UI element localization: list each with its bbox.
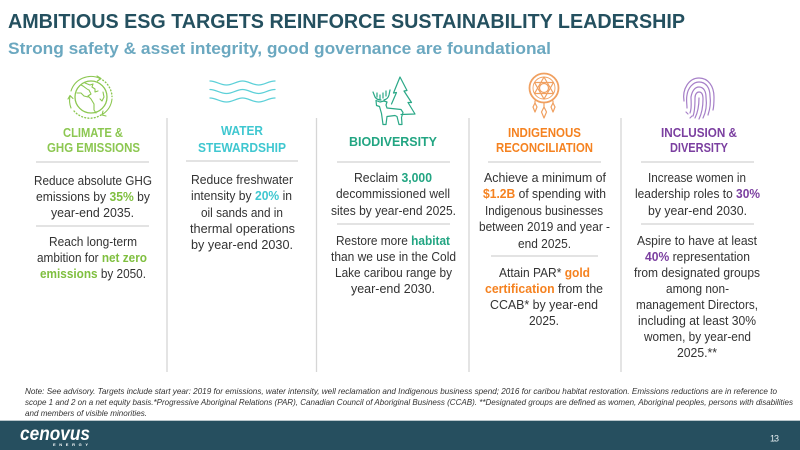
text: indigenous targets: CCAB* by year-end bbox=[490, 298, 598, 312]
icon: deer and tree bbox=[373, 77, 415, 124]
text: inclusion targets: among non- bbox=[666, 282, 729, 296]
heading: inclusion: DIVERSITY bbox=[670, 141, 729, 155]
heading: climate: CLIMATE & bbox=[63, 126, 123, 140]
text: inclusion targets: management Directors, bbox=[636, 298, 758, 312]
text: climate targets bbox=[34, 174, 152, 281]
subtitle: Strong safety & asset integrity, good governance are foundational bbox=[8, 40, 551, 58]
text: inclusion targets: women, by year-end bbox=[643, 330, 751, 344]
text: biodiversity targets: Restore more habitat bbox=[336, 234, 451, 248]
heading: water bbox=[198, 124, 286, 155]
text: biodiversity targets: Lake caribou range by bbox=[335, 266, 453, 280]
text: biodiversity targets: year-end 2030. bbox=[351, 282, 435, 296]
heading: climate: GHG EMISSIONS bbox=[47, 141, 140, 155]
text: biodiversity targets: Reclaim 3,000 bbox=[354, 171, 432, 185]
text: inclusion targets: Aspire to have at least bbox=[637, 234, 758, 248]
title: AMBITIOUS ESG TARGETS REINFORCE SUSTAINABILITY LEADERSHIP bbox=[8, 10, 685, 33]
text: indigenous targets: Attain PAR* gold bbox=[499, 266, 590, 280]
text: inclusion targets: Increase women in bbox=[648, 171, 746, 185]
text: inclusion targets bbox=[634, 171, 760, 360]
text: indigenous targets: between 2019 and year - bbox=[479, 220, 610, 234]
icon: waves bbox=[210, 81, 275, 102]
logo: ENERGY bbox=[53, 442, 88, 447]
heading: inclusion: INCLUSION & bbox=[661, 126, 737, 140]
text: climate targets: emissions by 35% by bbox=[36, 190, 151, 204]
icon: dreamcatcher bbox=[530, 74, 558, 118]
heading: biodiversity: BIODIVERSITY bbox=[349, 135, 438, 149]
text: indigenous targets: $1.2B of spending with bbox=[483, 187, 606, 201]
text: water target bbox=[190, 173, 295, 252]
text: water target: intensity by 20% in bbox=[191, 189, 292, 203]
heading: indigenous: RECONCILIATION bbox=[496, 141, 593, 155]
text: water target: by year-end 2030. bbox=[191, 238, 293, 252]
heading: indigenous: INDIGENOUS bbox=[508, 126, 581, 140]
text: water target: Reduce freshwater bbox=[191, 173, 293, 187]
text: inclusion targets: from designated groups bbox=[634, 266, 760, 280]
text: water target: oil sands and in bbox=[201, 206, 283, 220]
footnote: Note: See advisory. Targets include start year: 2019 for emissions, water intensity, well reclamation and Indigenous business spend; 2016 for caribou habitat restoration. Emissions reductions are in reference to bbox=[25, 386, 777, 396]
logo: cenovus bbox=[20, 424, 90, 445]
panel: climate and GHG emissions bbox=[34, 76, 152, 281]
heading: indigenous bbox=[496, 126, 593, 155]
text: climate targets: Reduce absolute GHG bbox=[34, 174, 152, 188]
text: climate targets: ambition for net zero bbox=[37, 251, 147, 265]
text: inclusion targets: 2025.** bbox=[677, 346, 717, 360]
text: inclusion targets: 40% representation bbox=[645, 250, 750, 264]
text: biodiversity targets bbox=[331, 171, 456, 296]
footer bar bbox=[0, 420, 800, 450]
panel: indigenous reconciliation bbox=[479, 74, 610, 328]
text: inclusion targets: by year-end 2030. bbox=[648, 204, 747, 218]
icon: globe with circular arrows bbox=[68, 76, 112, 118]
text: inclusion targets: including at least 30% bbox=[638, 314, 756, 328]
text: biodiversity targets: than we use in the Cold bbox=[331, 250, 456, 264]
panel: inclusion and diversity bbox=[634, 78, 760, 360]
panel: biodiversity bbox=[331, 77, 456, 296]
heading: inclusion bbox=[661, 126, 737, 155]
page number: 13 bbox=[770, 434, 779, 444]
text: indigenous targets: end 2025. bbox=[518, 237, 571, 251]
heading: water: STEWARDSHIP bbox=[198, 141, 286, 155]
text: indigenous targets: 2025. bbox=[529, 314, 559, 328]
panel: water stewardship bbox=[186, 81, 298, 252]
icon: fingerprint bbox=[684, 78, 714, 119]
footnote bbox=[25, 386, 794, 418]
text: indigenous targets bbox=[479, 171, 610, 328]
text: biodiversity targets: decommissioned well bbox=[336, 187, 450, 201]
text: climate targets: year-end 2035. bbox=[51, 206, 134, 220]
footnote: and members of visible minorities. bbox=[25, 408, 147, 418]
text: inclusion targets: leadership roles to 30% bbox=[635, 187, 760, 201]
text: indigenous targets: Achieve a minimum of bbox=[484, 171, 607, 185]
text: climate targets: Reach long-term bbox=[49, 235, 137, 249]
text: biodiversity targets: sites by year-end 2025. bbox=[331, 204, 456, 218]
text: water target: thermal operations bbox=[190, 222, 295, 236]
text: indigenous targets: certification from the bbox=[485, 282, 603, 296]
heading: water: WATER bbox=[221, 124, 263, 138]
heading: climate bbox=[47, 126, 140, 155]
text: climate targets: emissions by 2050. bbox=[40, 267, 146, 281]
text: indigenous targets: Indigenous businesses bbox=[485, 204, 603, 218]
